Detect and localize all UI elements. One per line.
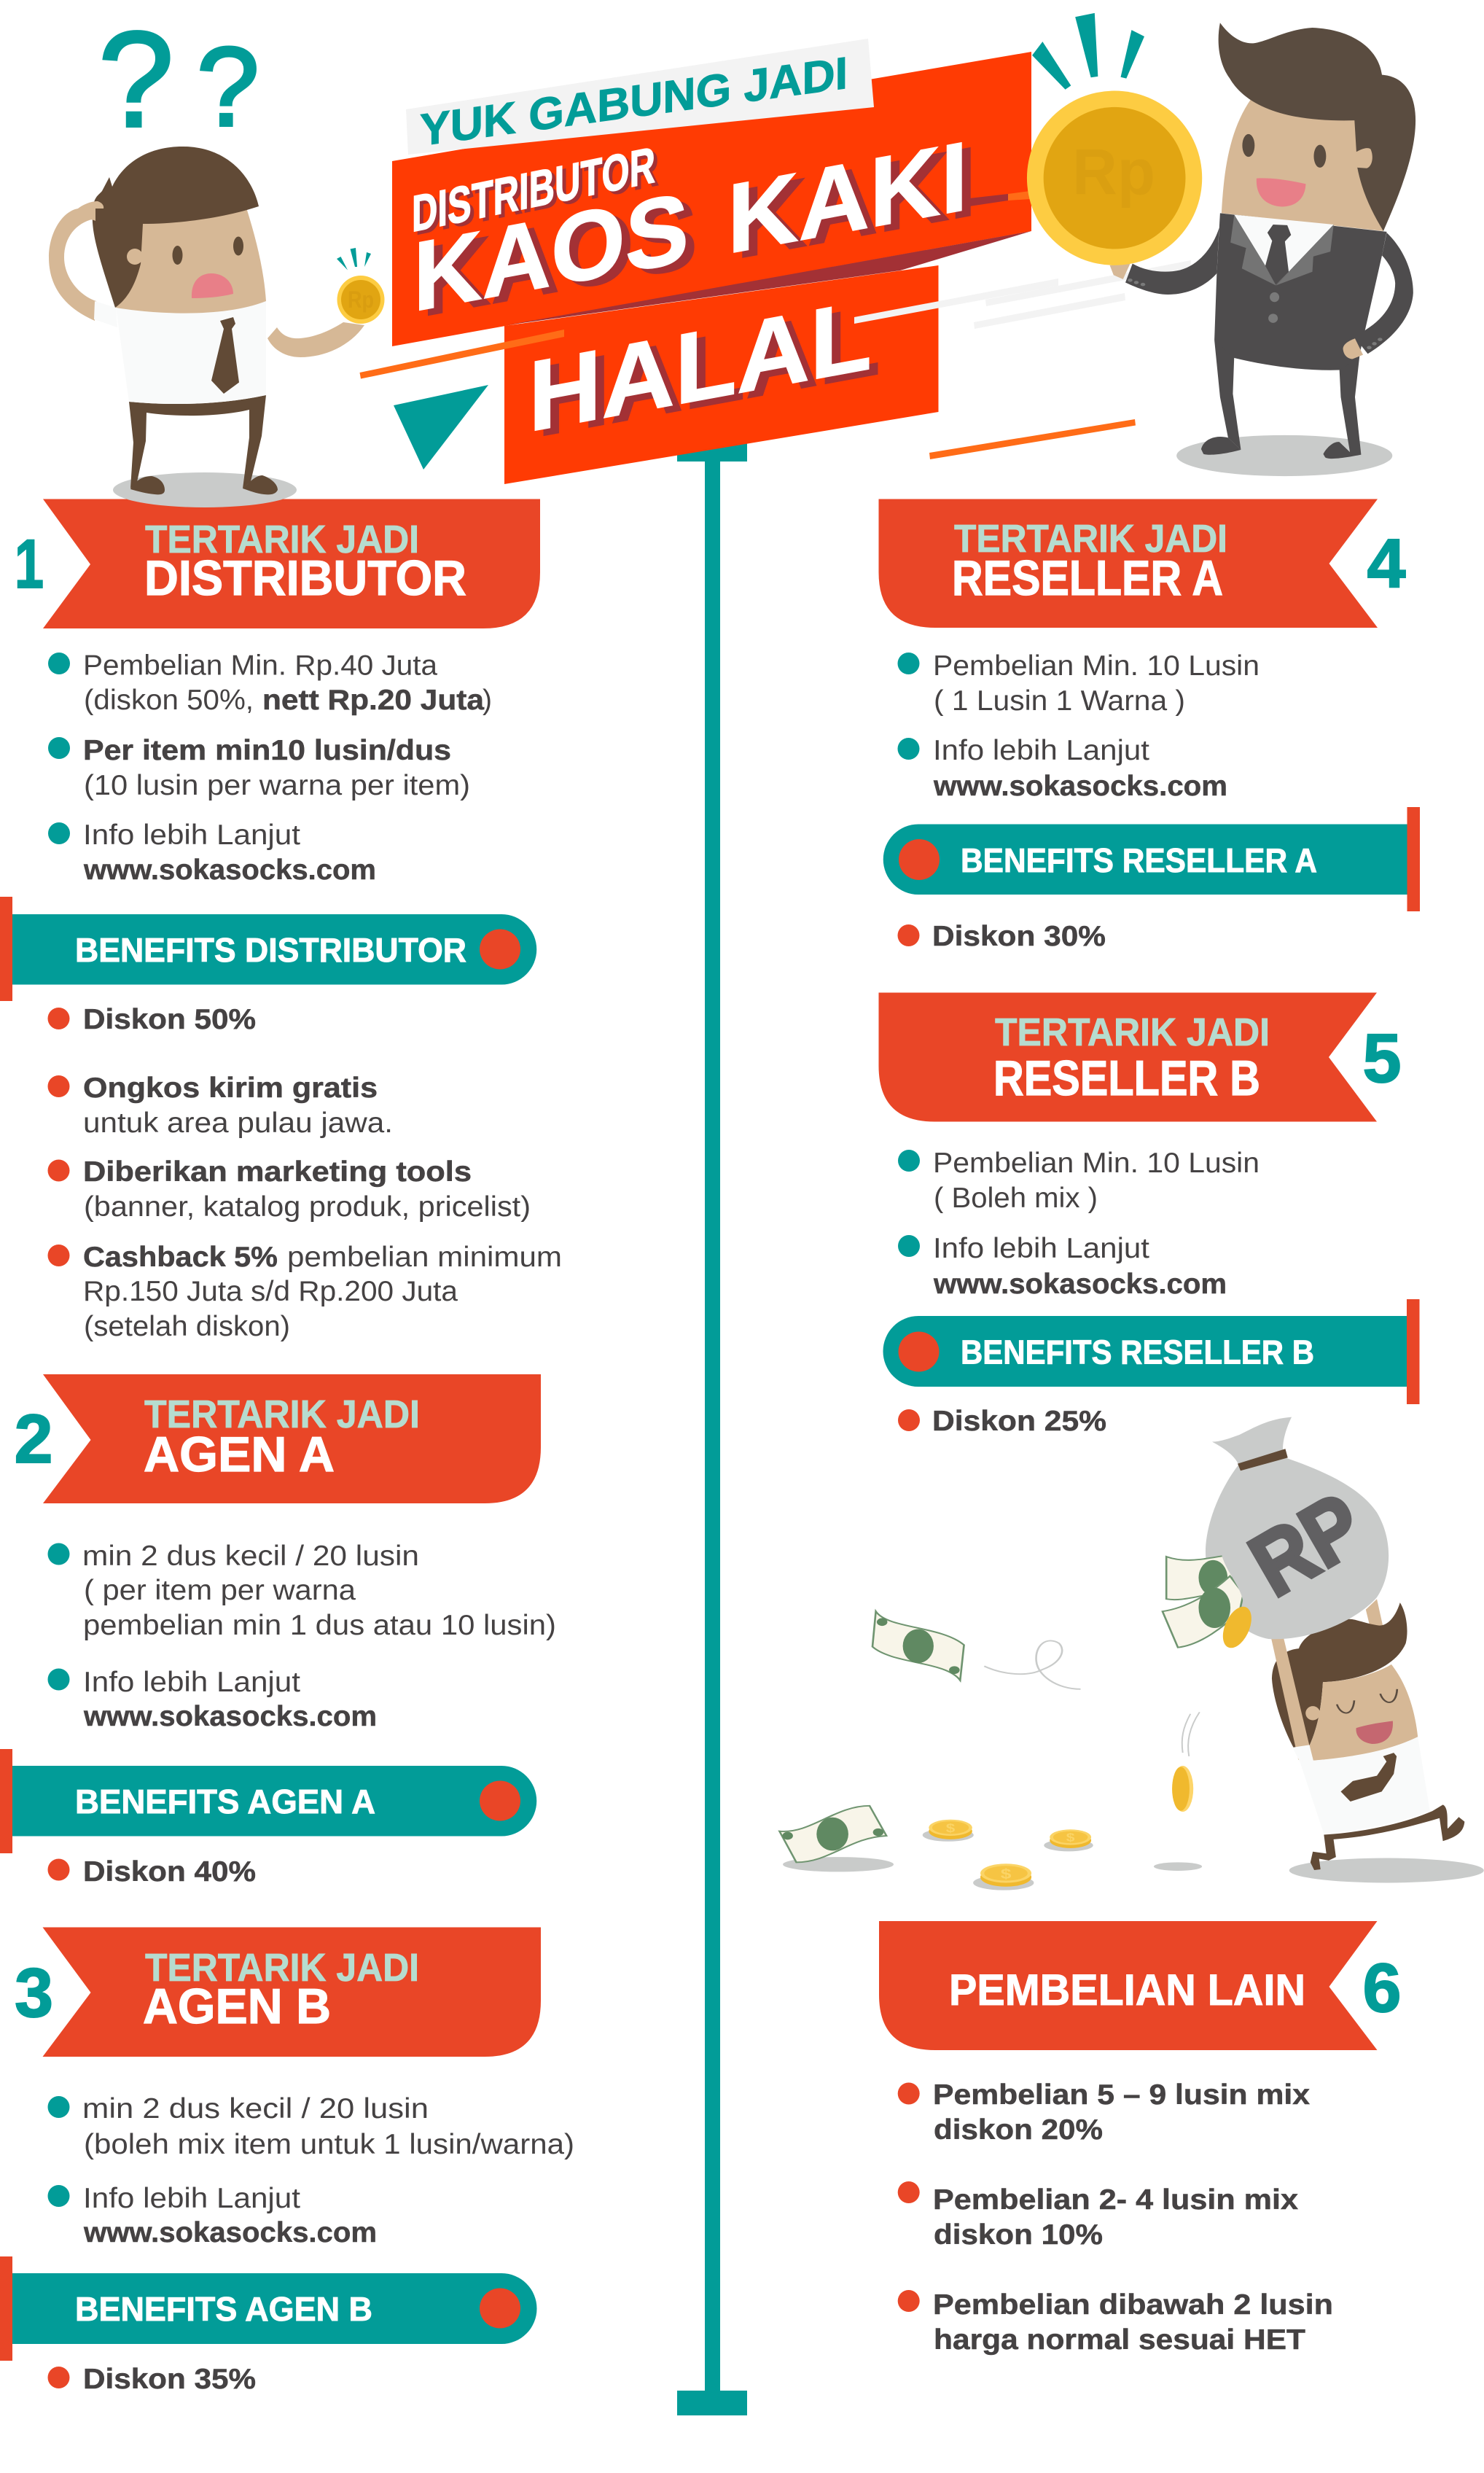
- banner 1: distributor: [43, 499, 540, 628]
- bullet: [898, 738, 920, 760]
- suit jacket: [1214, 213, 1386, 370]
- trousers: [1311, 1804, 1464, 1870]
- hair: [93, 147, 259, 308]
- banner 4: reseller A: TERTARIK JADI: [954, 517, 1227, 561]
- title: line HALAL: HALAL: [537, 284, 880, 459]
- banner 3: agen B: [42, 1928, 541, 2057]
- section: distributor requirements list: [48, 650, 492, 886]
- title: line KAOS KAKI: KAOS: [413, 171, 689, 332]
- back arm: [1366, 1599, 1383, 1627]
- banknotes in front of bag edge: [1163, 1555, 1243, 1648]
- closed eyes: [1337, 1689, 1397, 1713]
- shoes: [130, 475, 278, 494]
- bullet: [48, 2096, 70, 2118]
- money bag: [1206, 1417, 1389, 1639]
- item text: ( per item per warna: [84, 1575, 356, 1606]
- banner 6: pembelian lain: [879, 1921, 1378, 2050]
- floor coins: [929, 1820, 1091, 1887]
- section: reseller B benefits list: [898, 1406, 1106, 1437]
- item text: harga normal sesuai HET: [934, 2324, 1305, 2356]
- legs: [1214, 340, 1361, 455]
- item text: Pembelian 5 – 9 lusin mix: [933, 2079, 1310, 2111]
- section: reseller A benefits list: [898, 921, 1106, 952]
- bullet: [48, 653, 70, 674]
- illustration: man carrying money bag with falling money: [779, 1417, 1484, 1890]
- title: accent lines: [360, 191, 1191, 459]
- hair: [1272, 1602, 1407, 1761]
- benefits bar: reseller B: [883, 1299, 1420, 1404]
- item text: Info lebih Lanjut: [83, 1667, 300, 1698]
- banner 4: reseller A: [879, 499, 1378, 628]
- item text: ( Boleh mix ): [934, 1183, 1098, 1214]
- shoes: [1201, 437, 1361, 459]
- benefits bar: distributor: BENEFITS DISTRIBUTOR: [75, 931, 466, 969]
- benefits bar: reseller A: BENEFITS RESELLER A: [961, 841, 1317, 879]
- lapels: [1230, 215, 1334, 285]
- title: line DISTRIBUTOR: DISTRIBUTOR: [412, 136, 655, 243]
- section: agen B requirements list: [48, 2093, 574, 2248]
- banner 4: reseller A: RESELLER A: [952, 550, 1223, 606]
- ear: [1305, 1706, 1320, 1720]
- floor coins: $: [1001, 1866, 1012, 1882]
- item text: Diskon 40%: [83, 1856, 256, 1888]
- title: line KAOS KAKI: [413, 120, 977, 338]
- mouth: [1257, 178, 1305, 206]
- item text: Pembelian dibawah 2 lusin: [933, 2289, 1333, 2321]
- item text: (setelah diskon): [84, 1311, 290, 1342]
- benefits bar: distributor: [0, 897, 536, 1001]
- arm on hip: [1355, 233, 1413, 354]
- title: line KAOS KAKI: KAKI: [736, 125, 977, 279]
- item text: Cashback 5%: [83, 1242, 278, 1273]
- item text: Pembelian Min. Rp.40 Juta: [83, 650, 437, 681]
- item text: Rp.150 Juta s/d Rp.200 Juta: [83, 1276, 458, 1307]
- trousers: [129, 395, 266, 488]
- banner 1: distributor: TERTARIK JADI: [145, 518, 419, 561]
- squiggle trail: [984, 1640, 1081, 1689]
- bullet: [898, 2082, 920, 2104]
- number 5: 5: [1363, 1020, 1401, 1097]
- item text: (boleh mix item untuk 1 lusin/warna): [84, 2129, 574, 2160]
- title: line HALAL: HALAL: [528, 279, 872, 453]
- benefits bar: agen B: BENEFITS AGEN B: [75, 2290, 372, 2328]
- item text: Pembelian Min. 10 Lusin: [933, 1148, 1260, 1179]
- center timeline pole: [677, 437, 747, 2415]
- item text: pembelian minimum: [287, 1242, 562, 1273]
- item text: www.sokasocks.com: [83, 854, 376, 886]
- bullet: [48, 1008, 70, 1029]
- item text: www.sokasocks.com: [933, 771, 1227, 802]
- title: line DISTRIBUTOR: [412, 136, 659, 246]
- bullet: [48, 1159, 70, 1181]
- face: [1222, 98, 1383, 231]
- number 6: 6: [1363, 1950, 1401, 2027]
- number 1: 1: [15, 526, 44, 603]
- flying banknote: [872, 1611, 964, 1681]
- bullet: [48, 1245, 70, 1266]
- item text: Diskon 50%: [83, 1004, 256, 1035]
- coin by bag: [1217, 1605, 1257, 1650]
- title: line KAOS KAKI: KAOS: [422, 176, 698, 338]
- title: line DISTRIBUTOR: DISTRIBUTOR: [415, 139, 659, 246]
- raised arm: [49, 204, 96, 321]
- title: teal triangle: [394, 385, 488, 470]
- question marks: ?: [98, 4, 173, 155]
- item text: Diskon 30%: [932, 921, 1106, 952]
- bullet: [898, 1409, 920, 1431]
- grounded banknote: [779, 1806, 886, 1862]
- item text: min 2 dus kecil / 20 lusin: [82, 1541, 419, 1572]
- shirt: [1300, 1737, 1430, 1834]
- bullet: [48, 2185, 70, 2207]
- bullet: [898, 2290, 920, 2312]
- buttons: [1128, 279, 1383, 349]
- floor coins: $: [1066, 1831, 1075, 1844]
- section: agen B benefits list: [48, 2364, 256, 2395]
- bag front overlap: [1220, 1527, 1355, 1638]
- item text: Ongkos kirim gratis: [83, 1072, 378, 1104]
- big coin: [1027, 91, 1202, 265]
- item text: pembelian min 1 dus atau 10 lusin): [83, 1610, 556, 1641]
- bullet: [898, 1235, 920, 1257]
- bullet: [898, 1150, 920, 1172]
- eyes: [1242, 134, 1326, 168]
- section: other purchases list: [898, 2079, 1333, 2356]
- banner 1: distributor: DISTRIBUTOR: [144, 550, 466, 606]
- title: ribbon fold shadow: [507, 231, 1031, 325]
- item text: Info lebih Lanjut: [933, 735, 1149, 766]
- item text: www.sokasocks.com: [83, 1701, 377, 1732]
- banner 2: agen A: [43, 1374, 541, 1503]
- ground shadow: [1176, 435, 1392, 476]
- bullet: [48, 822, 70, 844]
- banner 5: reseller B: TERTARIK JADI: [995, 1010, 1270, 1054]
- item text: Pembelian 2- 4 lusin mix: [933, 2184, 1298, 2216]
- bullet: [898, 653, 920, 674]
- small coin: [337, 276, 385, 324]
- item text: (10 lusin per warna per item): [84, 770, 470, 801]
- sleeve: [94, 301, 117, 327]
- section: reseller B requirements list: [898, 1148, 1260, 1300]
- hair: [1219, 23, 1415, 231]
- benefits bar: reseller B: BENEFITS RESELLER B: [961, 1333, 1314, 1371]
- face: [1310, 1664, 1418, 1761]
- bullet: [898, 924, 920, 946]
- item text: Info lebih Lanjut: [933, 1233, 1149, 1264]
- item text: (banner, katalog produk, pricelist): [84, 1191, 531, 1223]
- item text: Pembelian Min. 10 Lusin: [933, 650, 1260, 682]
- title banner: [360, 39, 1191, 484]
- question marks: ?: [197, 24, 259, 149]
- number 2: 2: [15, 1401, 52, 1478]
- title: grey ribbon: [406, 39, 874, 155]
- hand under coin: [1110, 264, 1130, 279]
- banner 2: agen A: AGEN A: [144, 1427, 335, 1482]
- illustration: confused man with coin: [49, 4, 385, 507]
- mouth: [1356, 1721, 1393, 1744]
- item text: diskon 20%: [934, 2114, 1103, 2146]
- benefits bar: agen A: [0, 1749, 536, 1853]
- item text: Info lebih Lanjut: [83, 2183, 300, 2214]
- bullet: [48, 2367, 70, 2388]
- bullet: [48, 1075, 70, 1097]
- bullet: [48, 737, 70, 759]
- benefits bar: agen B: [0, 2256, 536, 2361]
- number 3: 3: [15, 1955, 53, 2032]
- section: agen A benefits list: [48, 1856, 256, 1888]
- sleeve: [1292, 1745, 1313, 1761]
- outstretched arm: [267, 322, 364, 357]
- face: [116, 208, 266, 313]
- bullet: [898, 2181, 920, 2203]
- title: line YUK GABUNG JADI: YUK GABUNG JADI: [420, 48, 848, 156]
- shirt: [116, 301, 266, 404]
- item text: untuk area pulau jawa.: [83, 1107, 393, 1139]
- ground shadows: [783, 1829, 1484, 1890]
- number 4: 4: [1367, 525, 1406, 602]
- ear: [1354, 148, 1372, 168]
- raised arm: [1271, 1635, 1313, 1760]
- banner 2: agen A: TERTARIK JADI: [144, 1393, 420, 1436]
- small coin rays: [337, 248, 371, 270]
- item text: nett Rp.20 Juta: [262, 685, 484, 716]
- section: reseller A requirements list: [898, 650, 1260, 802]
- floor coins: $: [946, 1822, 955, 1835]
- item text: www.sokasocks.com: [83, 2217, 377, 2248]
- section: agen A requirements list: [48, 1541, 556, 1732]
- arm holding coin: [1125, 227, 1219, 295]
- item text: (diskon 50%,: [84, 685, 254, 716]
- money bag label: RP: [1234, 1474, 1380, 1616]
- banner 5: reseller B: RESELLER B: [993, 1051, 1260, 1106]
- item text: diskon 10%: [934, 2219, 1103, 2251]
- banner 3: agen B: TERTARIK JADI: [145, 1946, 419, 1990]
- mouth: [192, 273, 233, 298]
- item text: Info lebih Lanjut: [83, 819, 300, 851]
- hand on hip: [1343, 338, 1363, 359]
- tie: [211, 317, 239, 394]
- bullet: [48, 1543, 70, 1565]
- bullet: [48, 1859, 70, 1881]
- small coin: Rp: [348, 287, 374, 313]
- banner 6: pembelian lain: PEMBELIAN LAIN: [949, 1966, 1305, 2014]
- big coin rays: [1032, 13, 1144, 90]
- shirt: [1234, 215, 1334, 285]
- ear: [127, 249, 143, 265]
- benefits bar: agen A: BENEFITS AGEN A: [75, 1783, 375, 1820]
- illustration: businessman with big coin: [1027, 13, 1415, 476]
- item text: Diskon 25%: [932, 1406, 1106, 1437]
- big coin: Rp: [1072, 136, 1155, 209]
- item text: Per item min10 lusin/dus: [83, 735, 451, 766]
- question marks: [98, 4, 259, 155]
- scratching hand: [78, 201, 104, 221]
- title: second red ribbon: [504, 265, 939, 484]
- item text: ( 1 Lusin 1 Warna ): [934, 685, 1185, 717]
- bullet: [48, 1668, 70, 1690]
- tie: [1340, 1753, 1397, 1802]
- eyes: [172, 236, 243, 265]
- ground shadow: [113, 472, 297, 507]
- item text: Diskon 35%: [83, 2364, 256, 2395]
- item text: ): [483, 685, 492, 716]
- title: line KAOS KAKI: KAKI: [727, 120, 968, 274]
- tie: [1265, 225, 1291, 285]
- item text: min 2 dus kecil / 20 lusin: [82, 2093, 429, 2125]
- title: main red ribbon: [392, 52, 1031, 346]
- banner 5: reseller B: [879, 993, 1377, 1121]
- item text: Diberikan marketing tools: [83, 1156, 472, 1188]
- section: distributor benefits list: [48, 1004, 562, 1342]
- item text: www.sokasocks.com: [933, 1269, 1227, 1300]
- falling coin: [1172, 1712, 1200, 1812]
- banner 3: agen B: AGEN B: [143, 1979, 331, 2034]
- benefits bar: reseller A: [883, 807, 1420, 911]
